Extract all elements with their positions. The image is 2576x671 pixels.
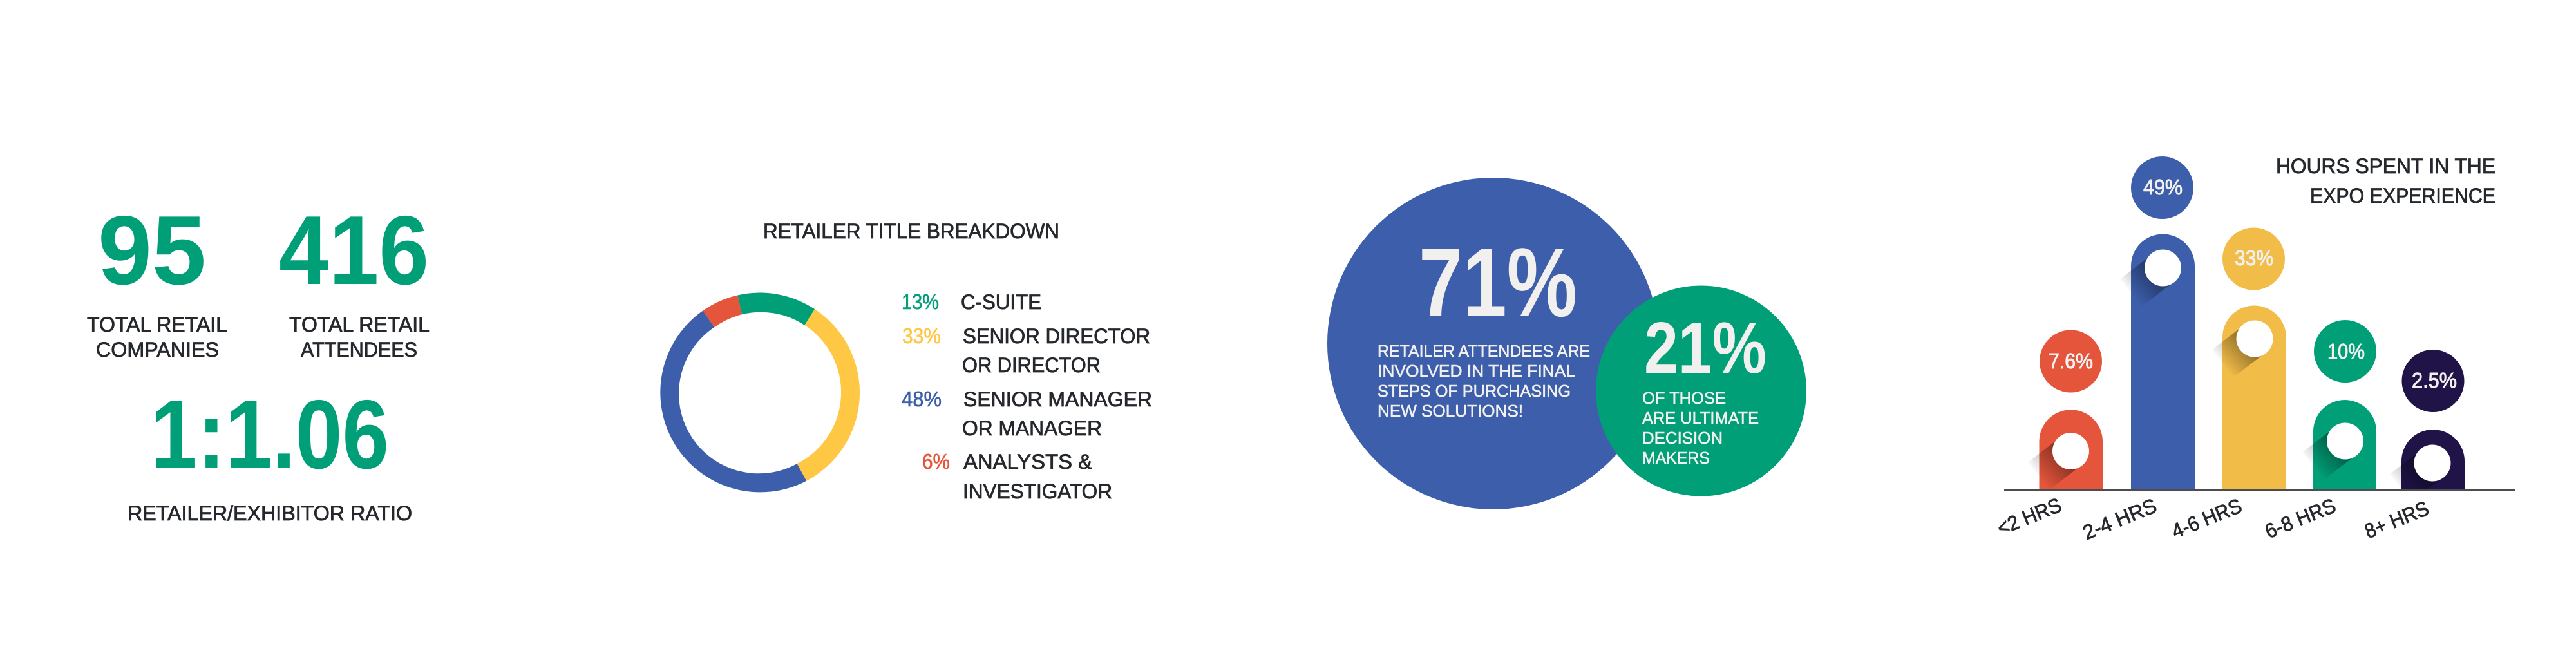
axis labels: <2 HRS	[1994, 493, 2065, 540]
bubble: 2.5%: 2.5%	[2412, 368, 2457, 392]
text: decision makers: DECISION	[1642, 428, 1723, 448]
text: decision makers	[1642, 388, 1759, 468]
text: retailer attendees: RETAILER ATTENDEES ARE	[1378, 341, 1590, 361]
legend item: analysts: 6%	[922, 449, 950, 473]
blue circle	[1327, 178, 1659, 509]
text: retailer attendees: NEW SOLUTIONS!	[1378, 401, 1523, 421]
text: decision makers: MAKERS	[1642, 448, 1710, 468]
text: retailer attendees: STEPS OF PURCHASING	[1378, 381, 1571, 401]
heading: hours spent	[2276, 155, 2496, 207]
axis labels: 8+ HRS	[2362, 496, 2432, 543]
bar: 4 to 6 hours	[2212, 305, 2286, 489]
legend item: c-suite: C-SUITE	[961, 290, 1041, 314]
legend item: senior director	[902, 324, 1150, 377]
bar: 2 to 4 hours	[2120, 234, 2195, 489]
legend item: c-suite	[902, 290, 1041, 314]
legend item: senior manager: OR MANAGER	[962, 417, 1102, 440]
label: retailer/exhibitor ratio: RETAILER/EXHIBITOR RATIO	[128, 502, 412, 525]
bubble: 7.6%	[2040, 330, 2102, 393]
legend item: senior director: SENIOR DIRECTOR	[963, 325, 1150, 348]
bar: 6 to 8 hours	[2303, 400, 2376, 489]
legend item: senior manager: SENIOR MANAGER	[963, 388, 1152, 411]
heading: hours spent: EXPO EXPERIENCE	[2310, 184, 2496, 207]
axis line	[2004, 489, 2515, 491]
stat: 1:1.06: 1:1.06	[151, 380, 389, 489]
stat: 21%: 21%	[1644, 307, 1766, 388]
axis labels: 2-4 HRS	[2079, 494, 2160, 544]
bubble: 7.6%: 7.6%	[2049, 349, 2093, 373]
stat: 416: 416	[279, 196, 429, 305]
panel: hours spent chart	[1994, 155, 2515, 544]
axis labels: 4-6 HRS	[2168, 494, 2245, 543]
legend item: senior director: OR DIRECTOR	[962, 354, 1101, 377]
bubble: 33%: 33%	[2235, 246, 2273, 270]
stat: 71%: 71%	[1419, 228, 1577, 337]
label: total retail attendees	[289, 313, 430, 361]
legend item: analysts: ANALYSTS &	[963, 450, 1092, 473]
label: total retail attendees: ATTENDEES	[301, 338, 417, 361]
legend item: analysts	[922, 449, 1112, 503]
legend item: senior manager	[902, 387, 1152, 440]
bubble: 49%	[2131, 156, 2193, 219]
text: decision makers: ARE ULTIMATE	[1642, 408, 1759, 428]
label: total retail companies	[87, 313, 227, 361]
bubble: 2.5%	[2402, 350, 2464, 412]
label: total retail companies: COMPANIES	[96, 338, 219, 361]
text: decision makers: OF THOSE	[1642, 388, 1726, 408]
legend item: analysts: INVESTIGATOR	[963, 480, 1112, 503]
bubble: 10%	[2314, 320, 2376, 383]
axis labels	[1994, 493, 2432, 544]
legend item: c-suite: 13%	[902, 290, 939, 314]
axis labels: 6-8 HRS	[2262, 494, 2339, 543]
bubble: 49%: 49%	[2143, 175, 2183, 199]
panel: retail totals	[87, 196, 430, 525]
panel: purchasing circles	[1327, 178, 1806, 509]
stat: 95: 95	[98, 196, 206, 305]
green circle	[1596, 286, 1806, 496]
bubble: 10%: 10%	[2327, 339, 2365, 363]
bubble: 33%	[2222, 228, 2285, 290]
heading: hours spent: HOURS SPENT IN THE	[2276, 155, 2496, 178]
donut chart	[660, 293, 860, 492]
legend item: senior director: 33%	[902, 324, 941, 348]
label: total retail attendees: TOTAL RETAIL	[289, 313, 430, 336]
bar: over 8 hours	[2391, 430, 2465, 489]
panel: retailer title breakdown	[660, 220, 1152, 503]
heading: retailer title breakdown: RETAILER TITLE BREAKDOWN	[763, 220, 1059, 243]
legend	[902, 290, 1152, 503]
text: retailer attendees: INVOLVED IN THE FINAL	[1378, 361, 1575, 381]
legend item: senior manager: 48%	[902, 387, 942, 411]
label: total retail companies: TOTAL RETAIL	[87, 313, 227, 336]
infographic canvas	[87, 156, 2515, 540]
bar: under 2 hours	[2029, 410, 2103, 489]
text: retailer attendees	[1378, 341, 1590, 421]
